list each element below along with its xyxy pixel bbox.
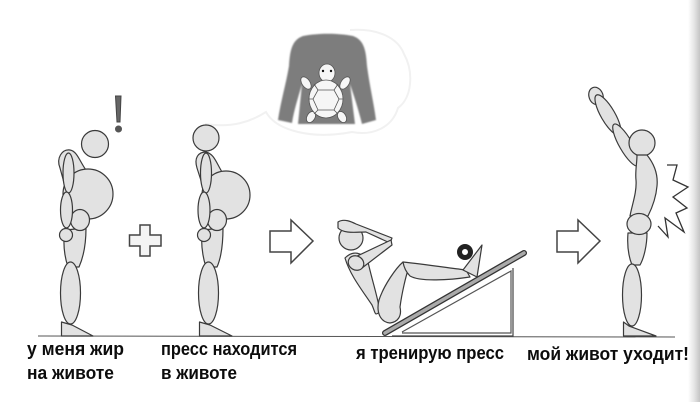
illustration: abdominal muscles with turtle	[278, 34, 376, 124]
figure: doing sit-ups	[338, 220, 482, 323]
caption 1	[27, 339, 124, 383]
caption 2: в животе	[161, 363, 237, 383]
figure: standing with belly fat	[59, 130, 113, 336]
arrow 2	[557, 220, 600, 263]
icon: burst	[658, 165, 688, 237]
icon: plus	[130, 225, 161, 256]
figure: arms raised, belly gone	[586, 85, 657, 336]
caption 2: пресс находится	[161, 339, 297, 359]
caption 4: мой живот уходит!	[527, 344, 689, 364]
caption 1: у меня жир	[27, 339, 124, 359]
icon: exclamation mark	[115, 96, 122, 132]
caption 3: я тренирую пресс	[355, 343, 504, 363]
figure: standing, thinking about abs	[193, 125, 250, 336]
caption 2	[161, 339, 297, 383]
arrow 1	[270, 220, 313, 263]
incline bench	[385, 253, 524, 336]
caption 1: на животе	[27, 363, 114, 383]
ground line	[38, 336, 675, 337]
thought bubble	[205, 30, 410, 135]
turtle	[299, 64, 352, 124]
